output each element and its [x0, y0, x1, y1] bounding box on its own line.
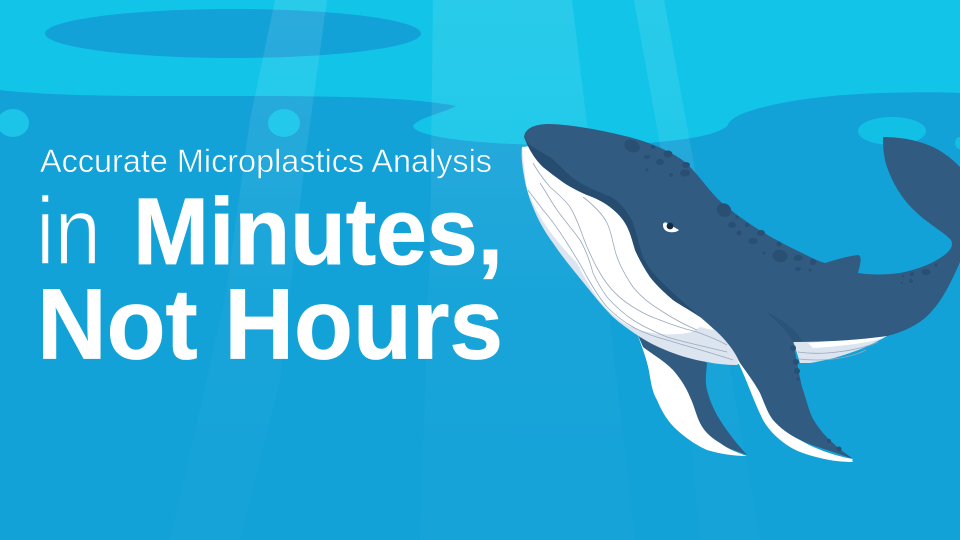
heading line two: Not Hours — [37, 268, 503, 380]
mouth shadow — [524, 137, 700, 317]
rear belly — [793, 336, 887, 363]
icon: whale — [522, 124, 960, 462]
rear flipper — [637, 333, 747, 456]
bubble — [268, 109, 300, 137]
heading line one: in — [36, 178, 101, 285]
light rays — [170, 0, 760, 540]
eye — [663, 222, 679, 232]
belly shadow — [522, 147, 760, 365]
throat grooves — [528, 163, 878, 360]
body — [524, 124, 960, 459]
subtitle line: Accurate Microplastics Analysis — [40, 143, 492, 179]
body spots — [622, 137, 938, 452]
title — [36, 143, 503, 380]
front flipper white edge — [737, 360, 853, 462]
flipper shoulder shade — [766, 312, 802, 342]
heading line one: Minutes, — [133, 179, 503, 285]
belly white — [522, 145, 713, 334]
